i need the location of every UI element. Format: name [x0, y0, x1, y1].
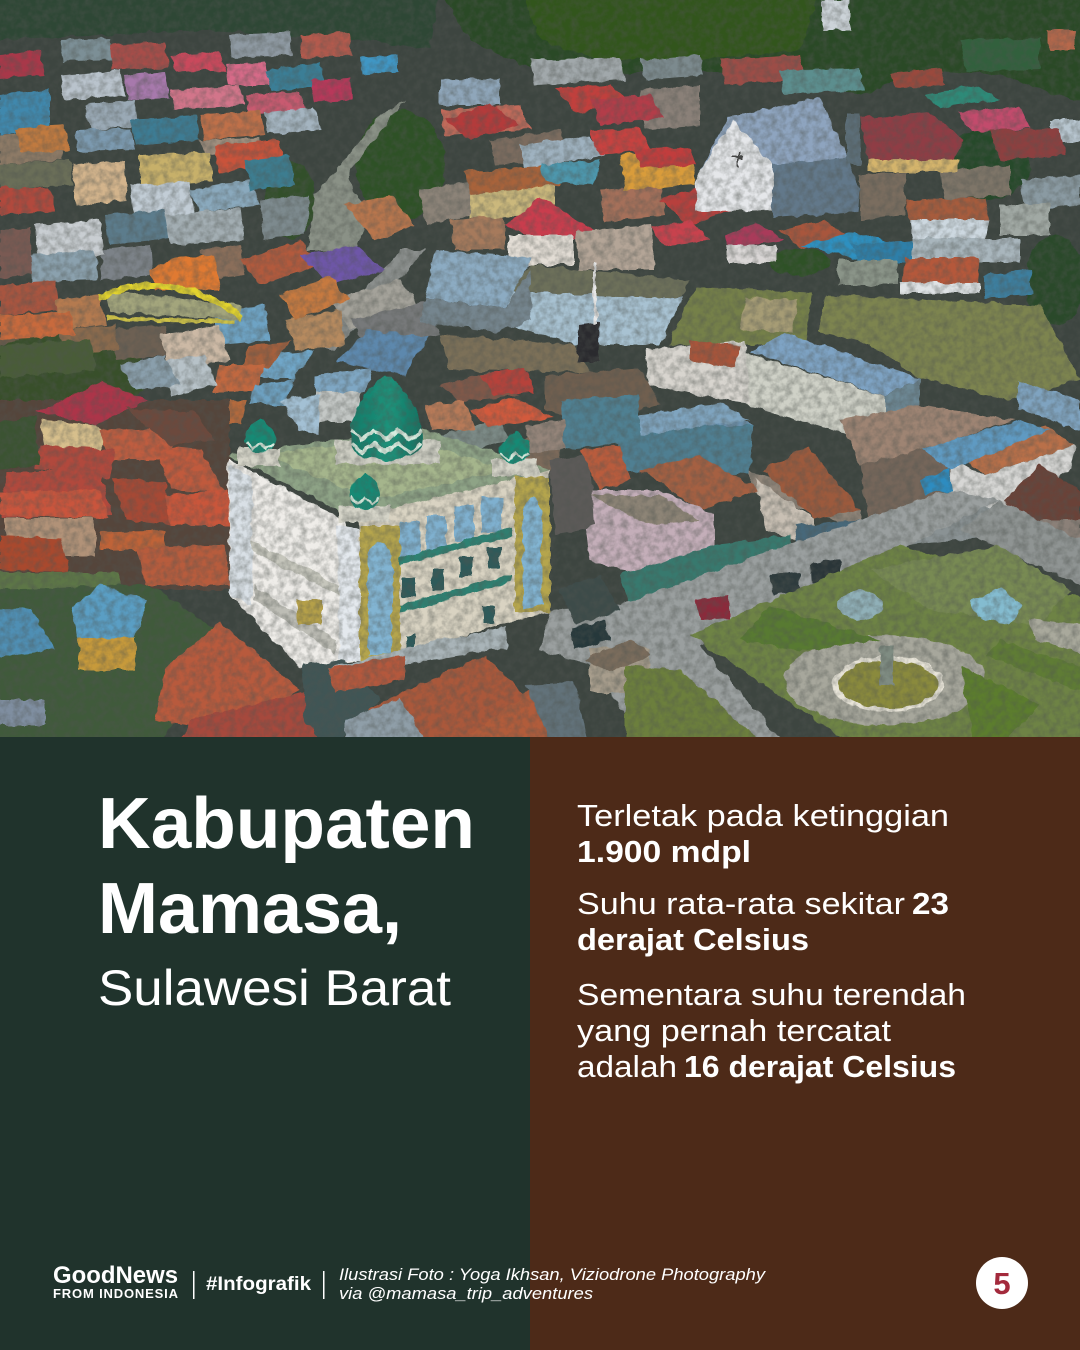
park with roundabout [690, 545, 1080, 750]
page number badge: 5 [993, 1266, 1011, 1301]
text block: average temperature: Suhu rata-rata sekitar [577, 886, 905, 921]
panel: dark green left [0, 737, 530, 1350]
mosque front wall [358, 470, 550, 662]
logo: GoodNews from Indonesia: GoodNews [53, 1262, 178, 1289]
title: Mamasa, [98, 869, 402, 949]
text block: average temperature [577, 886, 949, 957]
rusty roofs: lower left district [0, 382, 230, 590]
mosque lattice windows [400, 497, 502, 558]
text block: altitude: Terletak pada ketinggian [577, 798, 949, 833]
title [98, 784, 475, 1016]
logo: GoodNews from Indonesia: FROM INDONESIA [53, 1286, 179, 1301]
photo credit: via @mamasa_trip_adventures [339, 1284, 594, 1303]
hashtag with separators [193, 1271, 324, 1299]
roofs around the central plaza [120, 330, 660, 452]
houses: upper left district [0, 50, 415, 368]
houses: upper centre district [440, 78, 1050, 298]
mosque towers and blue panels [360, 525, 400, 660]
street and square in front of the mosque [540, 490, 1080, 750]
page number badge [976, 1257, 1028, 1309]
text block: average temperature: derajat Celsius [577, 922, 809, 957]
text block: altitude [577, 798, 949, 869]
panel: brown right [530, 737, 1080, 1350]
photo credit [339, 1265, 767, 1303]
filler: small roofs between the houses [0, 32, 1080, 545]
title: Kabupaten [98, 784, 475, 864]
forest: upper right hillside [0, 0, 1080, 402]
hashtag with separators: #Infografik [206, 1274, 311, 1295]
ground base of the town [0, 0, 1080, 750]
text block: lowest temperature: adalah [577, 1049, 677, 1084]
text block: lowest temperature: yang pernah tercatat [577, 1013, 891, 1048]
mosque [228, 375, 550, 668]
yellow bridge [98, 285, 242, 322]
text block: lowest temperature: 16 derajat Celsius [684, 1049, 956, 1084]
blue-roofed building block [618, 333, 1080, 475]
small domes [238, 418, 538, 522]
large grey-blue hall roof [420, 250, 532, 332]
main dome [335, 375, 440, 464]
houses: upper right district [822, 0, 1080, 172]
title: Sulawesi Barat [98, 960, 451, 1016]
text block: lowest temperature [577, 977, 966, 1084]
photo: aerial view of Mamasa town [0, 0, 1080, 750]
main road [315, 250, 425, 350]
text block: average temperature: 23 [912, 886, 949, 921]
text block: lowest temperature: Sementara suhu terendah [577, 977, 966, 1012]
mosque roof [228, 428, 550, 520]
mosque left wall [228, 458, 358, 668]
text block: altitude: 1.900 mdpl [577, 834, 751, 869]
photo credit: Ilustrasi Foto : Yoga Ikhsan, Viziodrone Photography [339, 1265, 767, 1284]
church with grey-blue roof [695, 97, 860, 218]
logo: GoodNews from Indonesia [53, 1262, 179, 1301]
sports field and plaza [440, 262, 1080, 400]
river [308, 100, 405, 250]
buildings: right middle row [550, 420, 1080, 605]
shadow texture over the town [0, 0, 1080, 737]
rusty roofs: bottom [0, 585, 590, 750]
